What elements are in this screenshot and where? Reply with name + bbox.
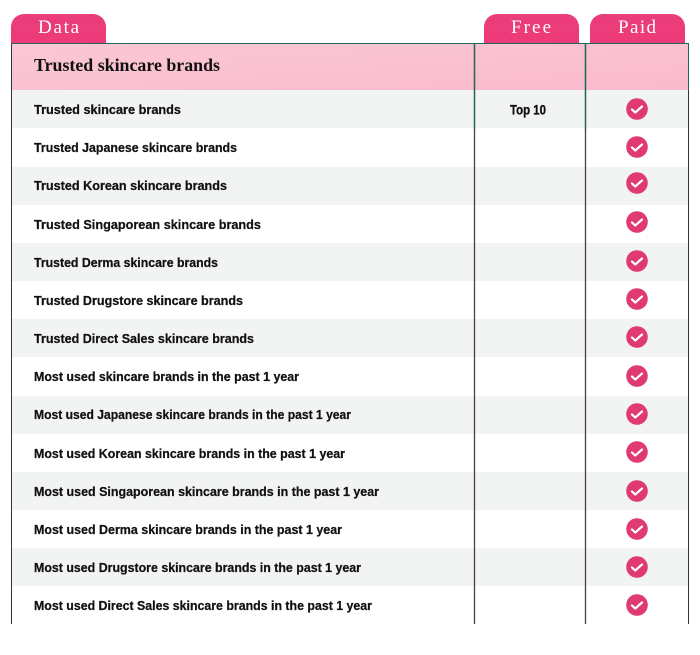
row stripes: [12, 90, 688, 586]
paid tier check icons: [626, 98, 648, 616]
row labels: Most used Derma skincare brands in the past 1 year: [34, 522, 342, 537]
row labels: Most used Singaporean skincare brands in the past 1 year: [34, 484, 379, 499]
row labels: Trusted Singaporean skincare brands: [34, 217, 261, 232]
section header band: [12, 44, 688, 90]
free tier value: Top 10: Top 10: [510, 102, 546, 118]
tab: Free: Free: [511, 17, 551, 38]
tab: Data: Data: [38, 17, 80, 38]
row labels: Most used Korean skincare brands in the past 1 year: [34, 446, 345, 461]
row labels: [34, 102, 379, 613]
tab: Data: [11, 14, 106, 43]
row labels: Most used Japanese skincare brands in the past 1 year: [34, 407, 351, 422]
row labels: Trusted Derma skincare brands: [34, 255, 218, 270]
tab: Free: [484, 14, 579, 43]
row labels: Trusted Direct Sales skincare brands: [34, 331, 254, 346]
row labels: Most used Direct Sales skincare brands in the past 1 year: [34, 598, 372, 613]
row labels: Trusted skincare brands: [34, 102, 181, 117]
tab: Paid: [590, 14, 685, 43]
section header band: Trusted skincare brands: [34, 55, 220, 75]
tab: Paid: Paid: [618, 17, 656, 38]
row labels: Most used skincare brands in the past 1 year: [34, 369, 299, 384]
row labels: Trusted Drugstore skincare brands: [34, 293, 243, 308]
row labels: Most used Drugstore skincare brands in the past 1 year: [34, 560, 361, 575]
row labels: Trusted Japanese skincare brands: [34, 140, 237, 155]
row labels: Trusted Korean skincare brands: [34, 178, 227, 193]
